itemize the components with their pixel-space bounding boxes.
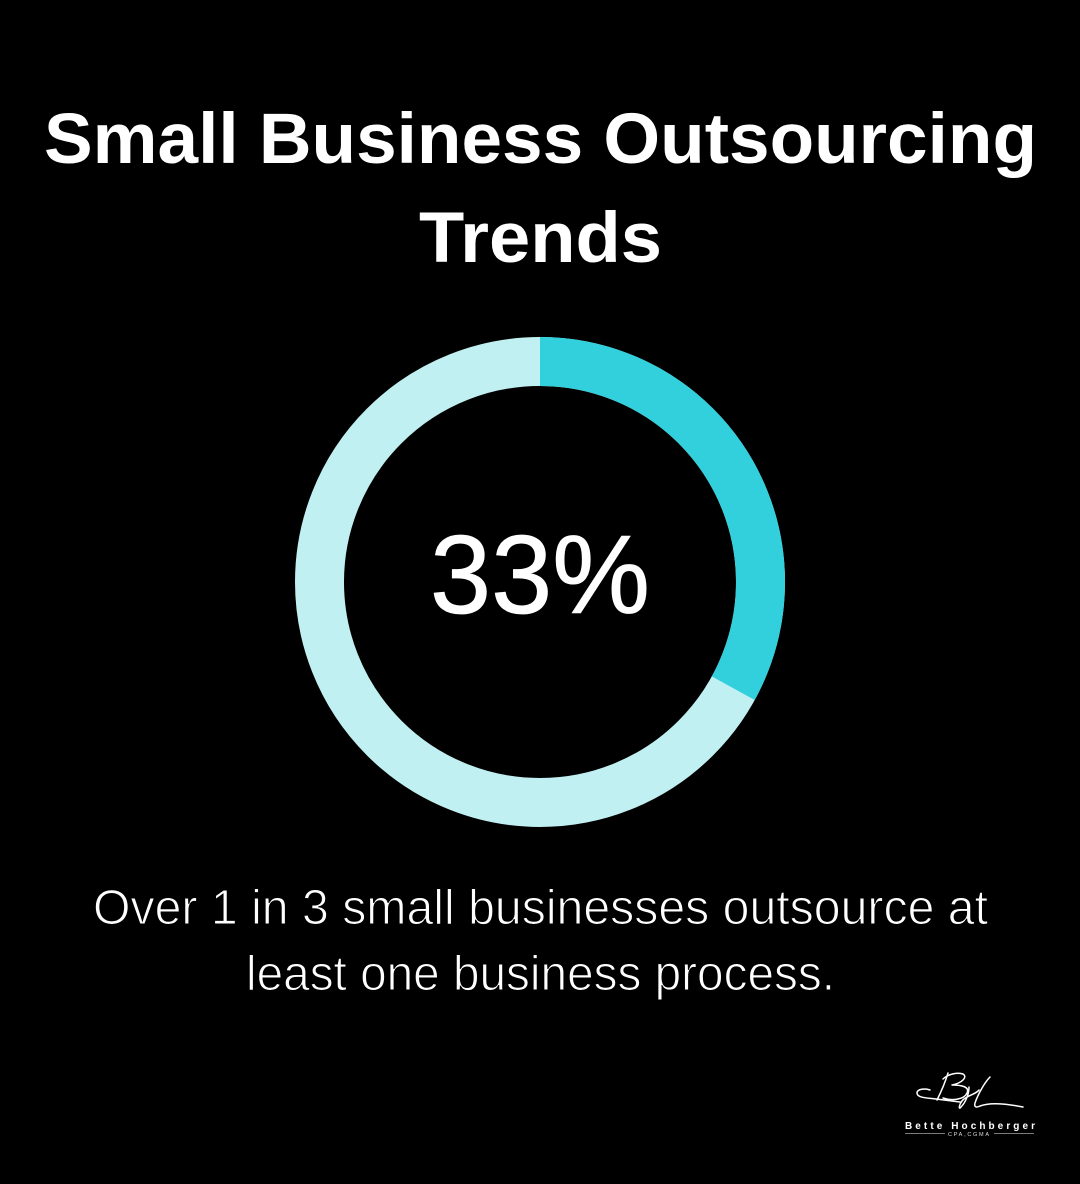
- title: [44, 99, 1037, 278]
- description text: Over 1 in 3 small businesses outsource at: [93, 881, 988, 935]
- donut chart: 33%: [320, 337, 785, 802]
- donut remainder ring: [320, 362, 760, 802]
- brand name: Bette Hochberger: [905, 1121, 1035, 1132]
- description text: least one business process.: [246, 947, 835, 1001]
- donut highlighted segment: [540, 337, 785, 700]
- brand divider left: [905, 1132, 945, 1135]
- brand credentials: CPA,CGMA: [948, 1132, 989, 1138]
- title: Small Business Outsourcing: [44, 99, 1037, 179]
- signature mark: [917, 1073, 1023, 1108]
- description text: [93, 881, 988, 1001]
- brand divider right: [994, 1132, 1034, 1135]
- logo: Bette Hochberger signature: [905, 1073, 1035, 1138]
- center percentage: 33%: [430, 513, 650, 637]
- title: Trends: [419, 198, 662, 278]
